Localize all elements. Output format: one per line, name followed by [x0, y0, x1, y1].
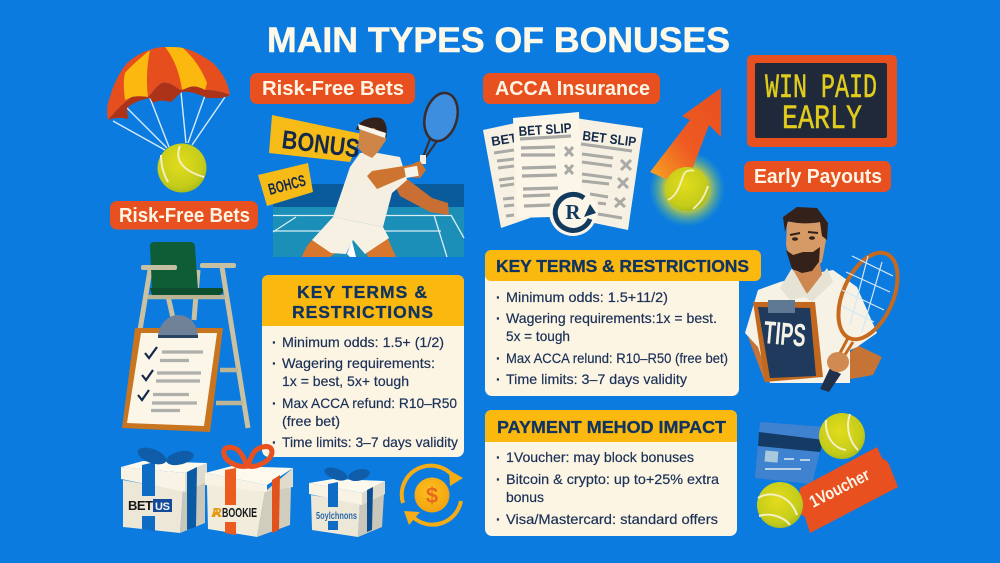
panel list: Minimum odds: 1.5+11/2): [506, 289, 668, 305]
tips board: TIPS: [762, 314, 807, 354]
slip center: [513, 112, 583, 218]
tennis ball top: [819, 413, 865, 459]
player: [302, 118, 449, 257]
gift: betus: US: [155, 501, 170, 513]
gift: betus: [121, 444, 207, 533]
panel list: (free bet): [282, 413, 340, 429]
panel list: Time limits: 3–7 days validity: [506, 371, 687, 387]
racket handle and hand: [820, 338, 853, 392]
head: [783, 207, 828, 273]
panel list: Wagering requirements:: [282, 355, 435, 371]
panel list: Visa/Mastercard: standard offers: [506, 511, 718, 527]
panel: key terms right: [485, 250, 761, 396]
panel list: ·: [496, 449, 501, 465]
panel list: ·: [272, 395, 277, 411]
slip left: BET: [490, 130, 518, 149]
panel heading: KEY TERMS &: [297, 282, 427, 302]
panel heading: [485, 410, 737, 442]
icon: bet slips with refund seal: [483, 112, 643, 236]
voucher ticket: [799, 447, 898, 533]
gift: betus: BET: [128, 498, 153, 513]
gift: third brand: [309, 465, 385, 537]
racket: [826, 244, 910, 348]
gifts row: [121, 444, 385, 537]
panel list: ·: [272, 334, 277, 350]
sign: small bonus: BOHCS: [267, 173, 308, 199]
panel list: ·: [272, 355, 277, 371]
panel heading: KEY TERMS & RESTRICTIONS: [496, 256, 749, 276]
panel list: Bitcoin & crypto: up to+25% extra: [506, 471, 719, 487]
panel heading: RESTRICTIONS: [292, 302, 433, 322]
panel list: ·: [272, 434, 277, 450]
court: [273, 184, 464, 257]
panel list: 5x = tough: [506, 328, 570, 344]
panel list: Max ACCA refund: R10–R50: [282, 395, 457, 411]
panel list: bonus: [506, 489, 544, 505]
torso and arms: [745, 264, 882, 383]
icon: flaming ball with rising arrow: [649, 88, 725, 227]
panel list: [496, 289, 728, 387]
tips board: [753, 300, 823, 382]
badge: risk-free bets top: [250, 73, 415, 104]
slip center: BET SLIP: [518, 120, 572, 139]
panel list: ·: [496, 350, 501, 366]
icon: coin with circular arrows: $: [426, 483, 438, 508]
panel list: ·: [496, 310, 501, 326]
panel list: ·: [496, 511, 501, 527]
panel list: 1Voucher: may block bonuses: [506, 449, 694, 465]
panel heading: PAYMENT MEHOD IMPACT: [497, 417, 726, 437]
panel list: ·: [496, 471, 501, 487]
panel list: ·: [496, 371, 501, 387]
gift: arbookie: BOOKIE: [222, 505, 257, 520]
slip right: BET SLIP: [582, 128, 637, 150]
panel list: Time limits: 3–7 days validity: [282, 434, 458, 450]
badge: early payouts: Early Payouts: [754, 166, 882, 188]
illustration: tennis player with bonus signs: [258, 89, 464, 257]
badge: ACCA insurance: ACCA Insurance: [495, 78, 650, 100]
gift: arbookie: [205, 446, 293, 537]
refund seal: [549, 188, 597, 236]
panel list: Max ACCA relund: R10–R50 (free bet): [506, 350, 728, 366]
slip right: [570, 118, 643, 230]
panel list: Minimum odds: 1.5+ (1/2): [282, 334, 444, 350]
gift: third brand: 5oylchnons: [316, 511, 357, 522]
icon: card, balls and 1Voucher ticket: [755, 413, 898, 533]
icon: umpire chair and clipboard: [122, 242, 248, 432]
badge: risk-free bets left: Risk-Free Bets: [119, 205, 250, 227]
panel heading: [262, 275, 464, 326]
panel heading: [485, 250, 761, 281]
scoreboard: win paid early: EARLY: [782, 101, 862, 139]
credit card: [755, 422, 826, 484]
scoreboard: win paid early: WIN PAID: [765, 70, 877, 108]
badge: ACCA insurance: [483, 73, 660, 104]
refund seal: R: [565, 200, 581, 224]
icon: parachute with tennis ball: [107, 47, 230, 192]
sign: bonus: [269, 115, 362, 163]
illustration: coach with tips board: [745, 207, 910, 392]
tennis ball bottom: [757, 482, 803, 528]
gift: arbookie: AR: [211, 505, 223, 520]
panel list: ·: [496, 289, 501, 305]
racket: [419, 89, 463, 164]
title: MAIN TYPES OF BONUSES: [267, 21, 730, 60]
sign: small bonus: [258, 163, 313, 206]
voucher ticket: 1Voucher: [806, 465, 873, 512]
panel list: [496, 449, 719, 527]
chair: [140, 242, 248, 428]
scoreboard: win paid early: [747, 55, 897, 147]
clipboard: [122, 315, 223, 432]
sign: bonus: BONUS: [280, 124, 361, 163]
slip left: [483, 122, 530, 228]
panel: payment method impact: [485, 410, 737, 536]
panel: key terms left: [262, 275, 464, 457]
panel list: 1x = best, 5x+ tough: [282, 373, 409, 389]
icon: coin with circular arrows: [402, 466, 463, 525]
panel list: [272, 334, 458, 450]
panel list: Wagering requirements:1x = best.: [506, 310, 717, 326]
badge: risk-free bets top: Risk-Free Bets: [262, 78, 404, 100]
badge: early payouts: [744, 161, 891, 192]
